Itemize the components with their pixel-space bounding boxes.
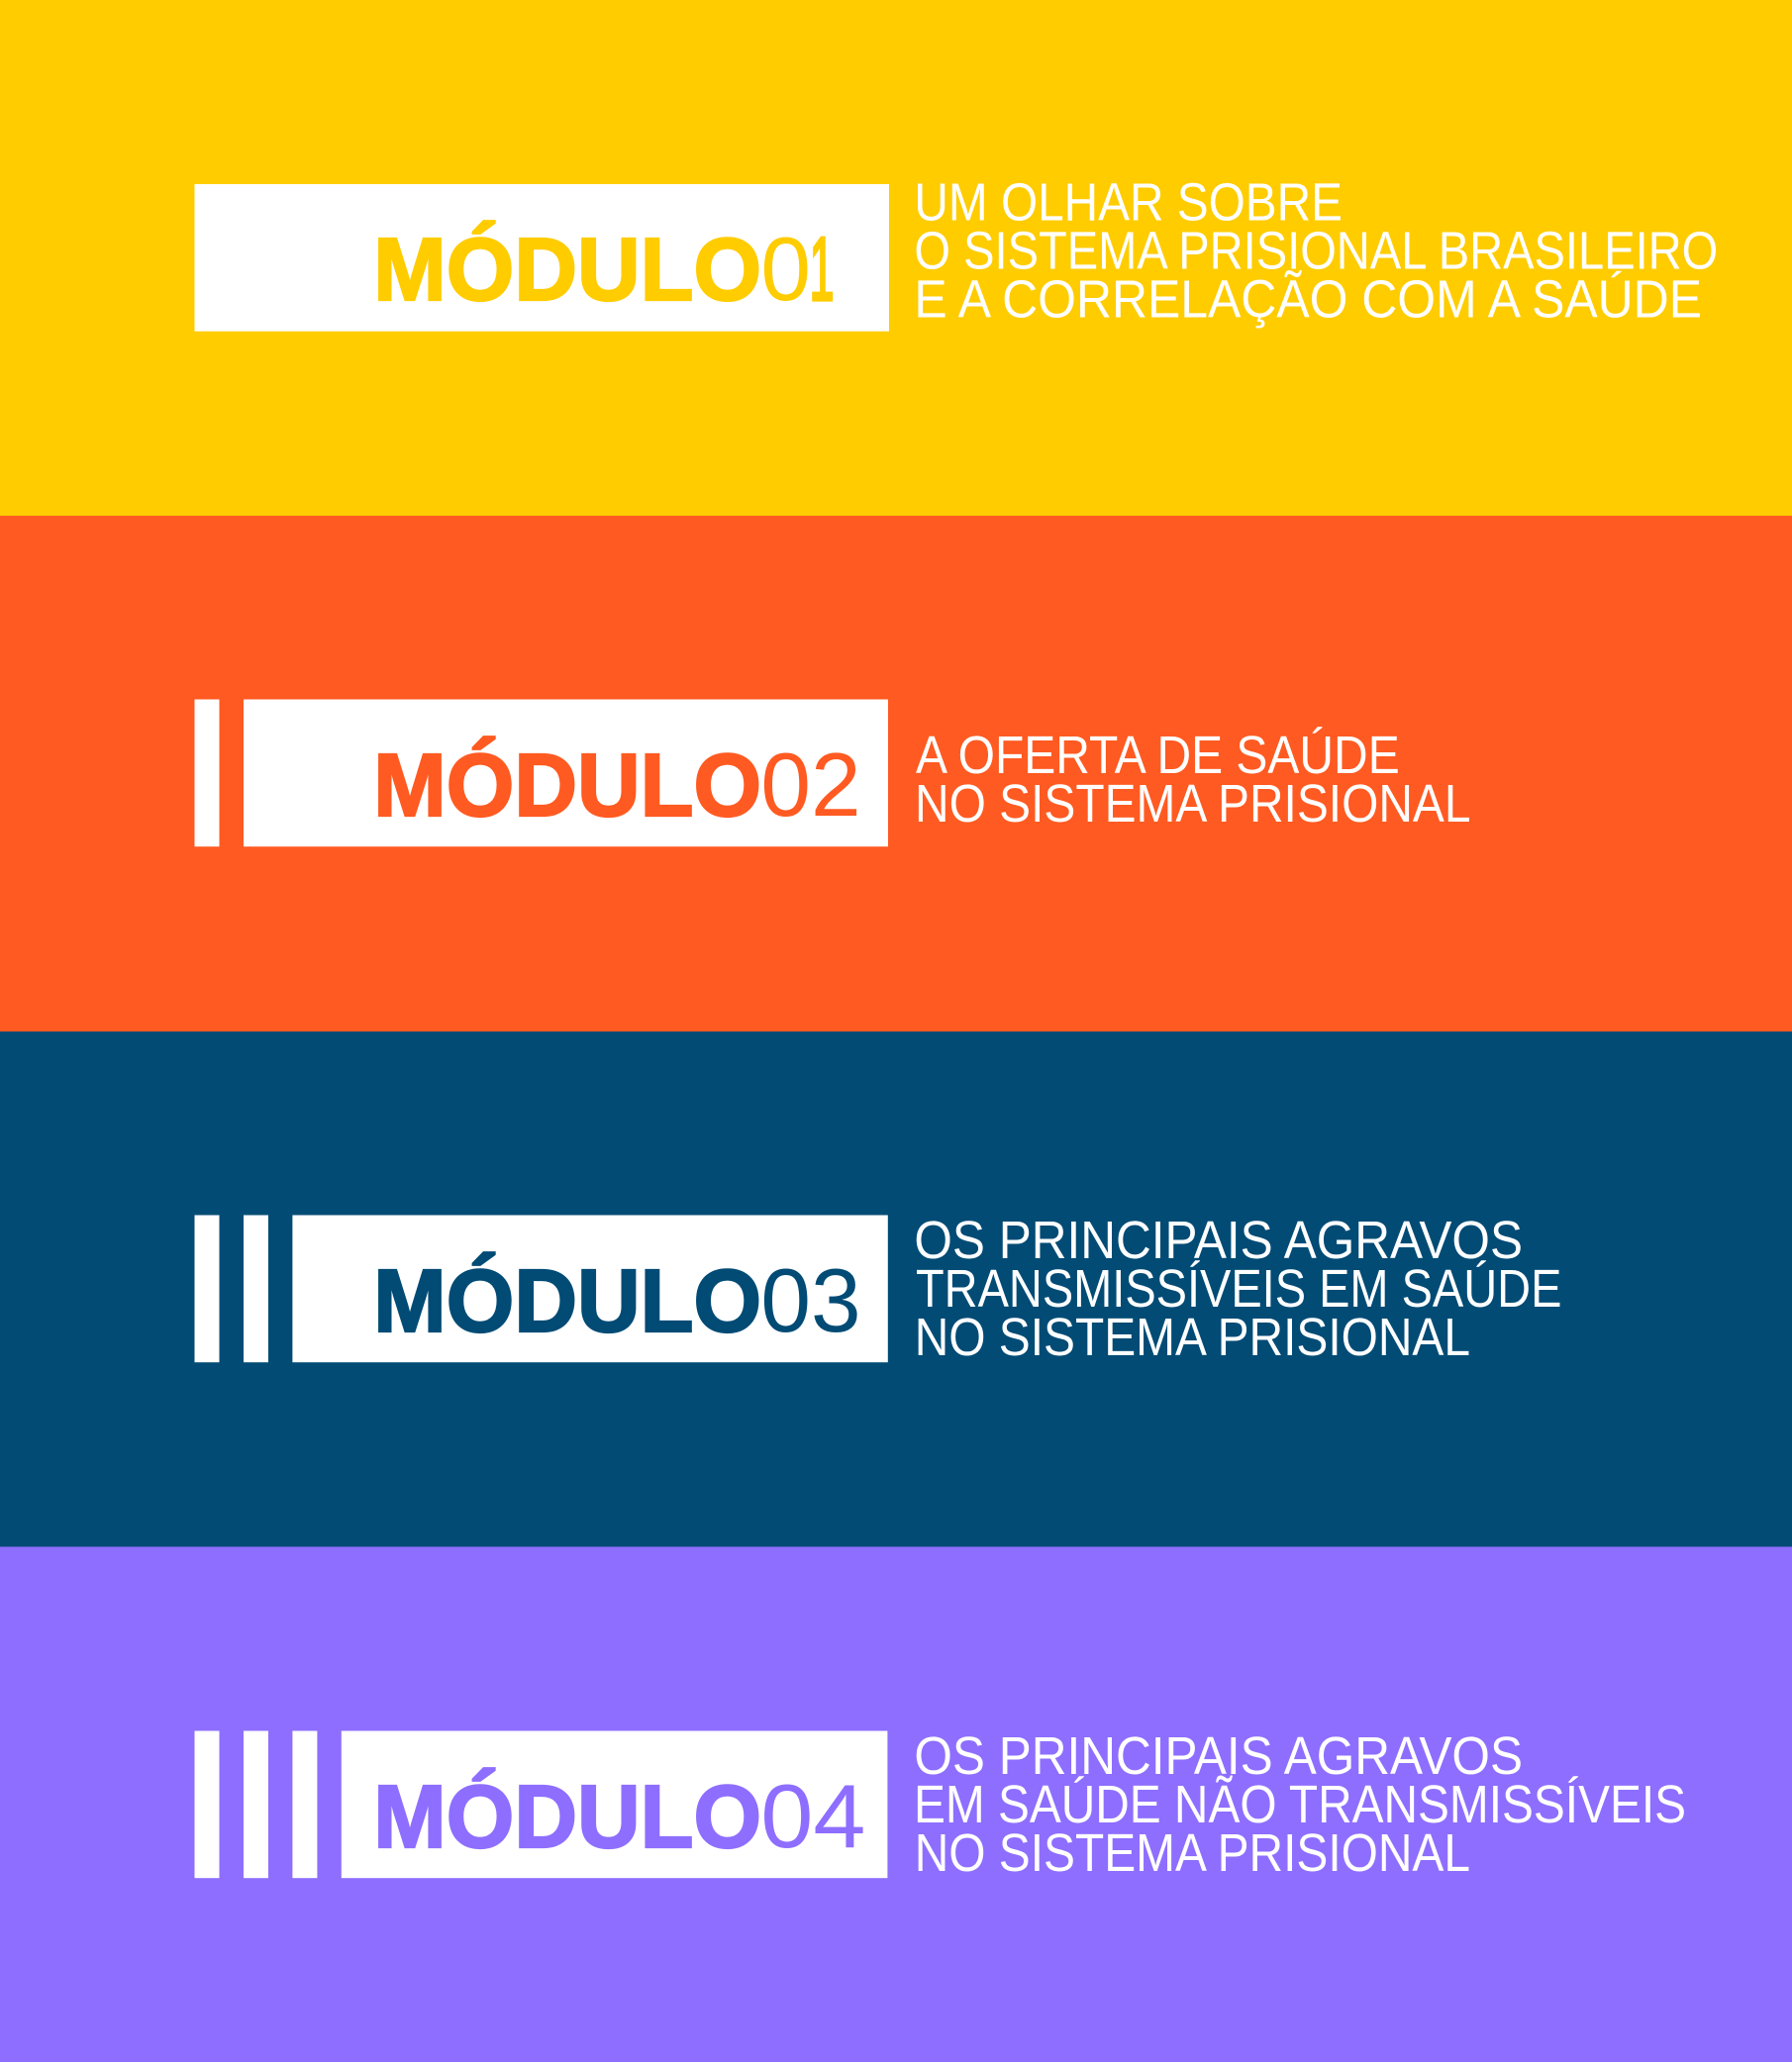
text block: módulo 03 title xyxy=(914,1212,1561,1367)
heading: módulo 01: 0 xyxy=(760,220,811,320)
text block: módulo 03 title: TRANSMISSÍVEIS EM SAÚDE xyxy=(916,1260,1561,1319)
label box: módulo 02 xyxy=(244,699,888,846)
heading: módulo 04: 04 xyxy=(760,1767,865,1867)
text block: módulo 03 title: OS PRINCIPAIS AGRAVOS xyxy=(914,1212,1523,1270)
heading: módulo 02: 02 xyxy=(760,736,861,835)
text block: módulo 02 title: NO SISTEMA PRISIONAL xyxy=(915,775,1471,834)
text block: módulo 04 title: NO SISTEMA PRISIONAL xyxy=(915,1824,1470,1883)
panel: módulo 01: 1 xyxy=(810,220,835,320)
label box: módulo 03 xyxy=(292,1216,888,1362)
progress bars: módulo 04 xyxy=(194,1730,317,1878)
progress bars: módulo 03 xyxy=(194,1216,268,1362)
text block: módulo 02 title xyxy=(915,727,1471,834)
progress bars: módulo 02 xyxy=(194,699,220,846)
heading: módulo 04: MÓDULO xyxy=(373,1767,761,1867)
text block: módulo 04 title xyxy=(914,1727,1686,1883)
heading: módulo 03: 03 xyxy=(760,1251,861,1351)
heading: módulo 02: MÓDULO xyxy=(373,736,761,835)
label box: módulo 01 xyxy=(194,184,889,332)
text block: módulo 03 title: NO SISTEMA PRISIONAL xyxy=(915,1309,1470,1367)
text block: módulo 01 title: E A CORRELAÇÃO COM A SAÚDE xyxy=(914,271,1702,330)
panel: módulo 01 xyxy=(0,0,1792,516)
text block: módulo 04 title: EM SAÚDE NÃO TRANSMISSÍVEIS xyxy=(914,1776,1686,1834)
text block: módulo 02 title: A OFERTA DE SAÚDE xyxy=(916,727,1400,785)
panel: módulo 04 xyxy=(0,1546,1792,2062)
label box: módulo 04 xyxy=(342,1730,887,1878)
heading: módulo 03: MÓDULO xyxy=(373,1251,761,1351)
text block: módulo 01 title xyxy=(914,174,1718,330)
text block: módulo 04 title: OS PRINCIPAIS AGRAVOS xyxy=(914,1727,1523,1786)
text block: módulo 01 title: UM OLHAR SOBRE xyxy=(914,174,1343,233)
heading: módulo 01: MÓDULO xyxy=(373,220,761,320)
panel: módulo 03 xyxy=(0,1031,1792,1547)
panel: módulo 02 xyxy=(0,516,1792,1031)
